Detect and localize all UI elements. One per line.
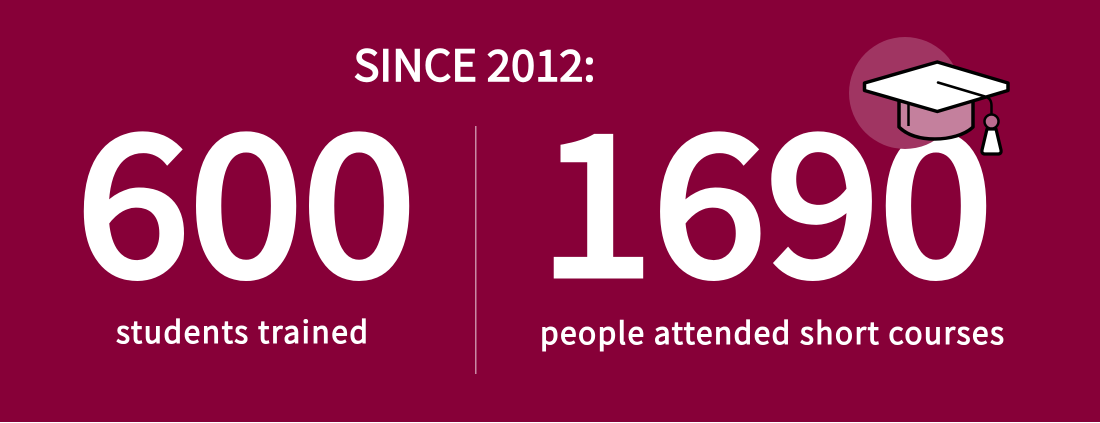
heading: SINCE 2012:: [354, 32, 596, 94]
statistic: 600: 600: [76, 51, 416, 331]
tassel: [982, 129, 1001, 154]
tassel knot: [984, 114, 998, 128]
tassel cord: [938, 82, 992, 116]
cap fold line: [907, 103, 910, 126]
mortarboard: [864, 62, 1008, 112]
cap base: [899, 96, 973, 139]
divider: [475, 126, 476, 374]
label: people attended short courses: people attended short courses: [540, 309, 1004, 353]
label: students trained: students trained: [116, 308, 368, 352]
icon: graduation cap: [849, 37, 1008, 154]
icon backdrop circle: [849, 37, 961, 149]
statistic: 1690: 1690: [540, 51, 992, 331]
